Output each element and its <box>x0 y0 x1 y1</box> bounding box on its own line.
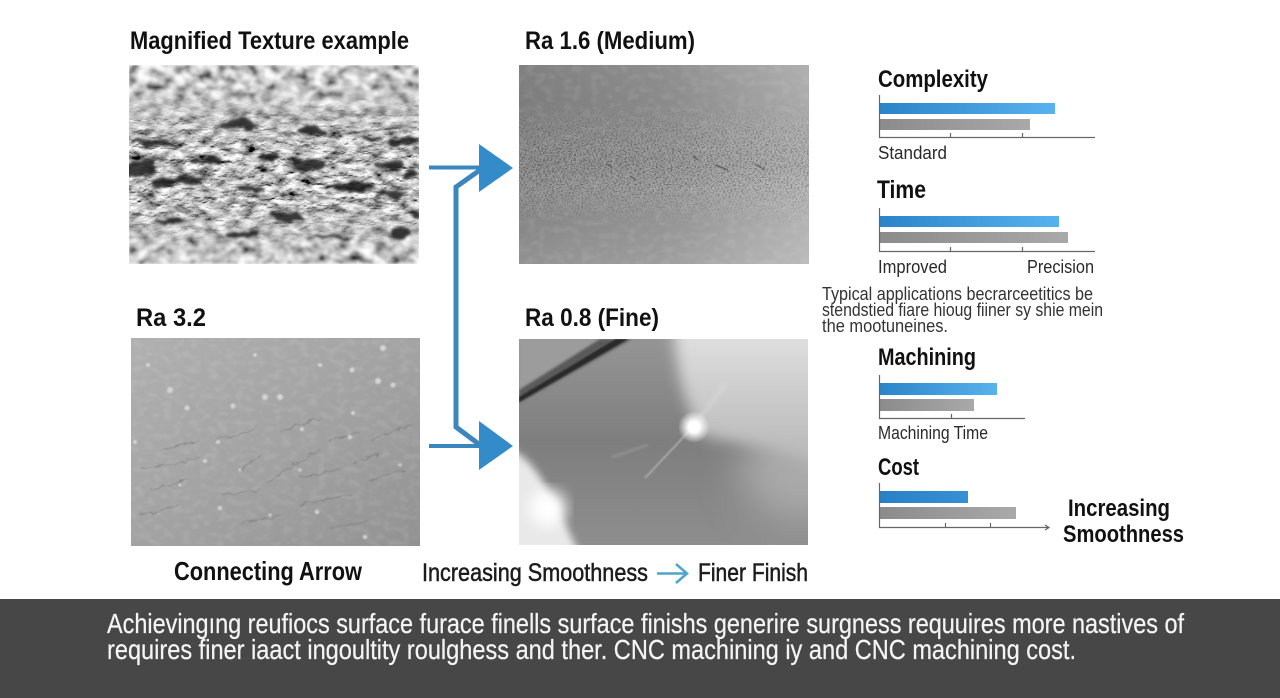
chart: machining: Machining Time <box>878 423 988 443</box>
caption: increasing smoothness to finer finish: Increasing Smoothness <box>422 559 648 587</box>
heading: Ra 3.2: Ra 3.2 <box>136 304 206 332</box>
label: increasing smoothness <box>1063 495 1184 548</box>
photo: rough magnified texture <box>124 65 423 264</box>
photo: medium surface <box>519 65 809 264</box>
chart: machining: Machining <box>878 344 976 371</box>
summary banner <box>0 599 1280 698</box>
caption: connecting arrow: Connecting Arrow <box>174 556 363 586</box>
heading: Ra 1.6: Ra 1.6 (Medium) <box>525 27 695 55</box>
text block: typical applications: stendstied fiare hioug fiiner sy shie mein <box>822 300 1103 320</box>
label: increasing smoothness: Increasing <box>1068 495 1170 522</box>
chart: machining <box>878 344 1025 443</box>
heading: Ra 0.8: Ra 0.8 (Fine) <box>525 304 659 332</box>
chart: time: Time <box>877 176 926 204</box>
chart: cost <box>878 454 1049 530</box>
chart: complexity <box>878 66 1095 163</box>
caption: increasing smoothness to finer finish <box>422 559 808 587</box>
chart: complexity: Complexity <box>878 66 989 93</box>
chart: time <box>877 176 1095 277</box>
photo: Ra 3.2 surface <box>131 338 420 546</box>
text block: typical applications: Typical applications becrarceetitics be <box>822 284 1093 304</box>
caption: increasing smoothness to finer finish: Finer Finish <box>698 559 808 587</box>
summary banner: requires finer iaact ingoultity roulghess and ther. CNC machining iy and CNC machining cost. <box>107 634 1076 665</box>
label: increasing smoothness: Smoothness <box>1063 521 1184 548</box>
chart: complexity: Standard <box>878 143 947 163</box>
chart: cost: Cost <box>878 454 919 481</box>
connecting arrows <box>429 144 513 470</box>
heading: magnified texture example: Magnified Texture example <box>130 27 409 55</box>
text block: typical applications: the mootuneines. <box>822 316 948 336</box>
chart: time: Improved <box>878 257 947 277</box>
chart: time: Precision <box>1027 257 1094 277</box>
text block: typical applications <box>822 284 1103 336</box>
photo: fine polished surface <box>519 339 808 545</box>
